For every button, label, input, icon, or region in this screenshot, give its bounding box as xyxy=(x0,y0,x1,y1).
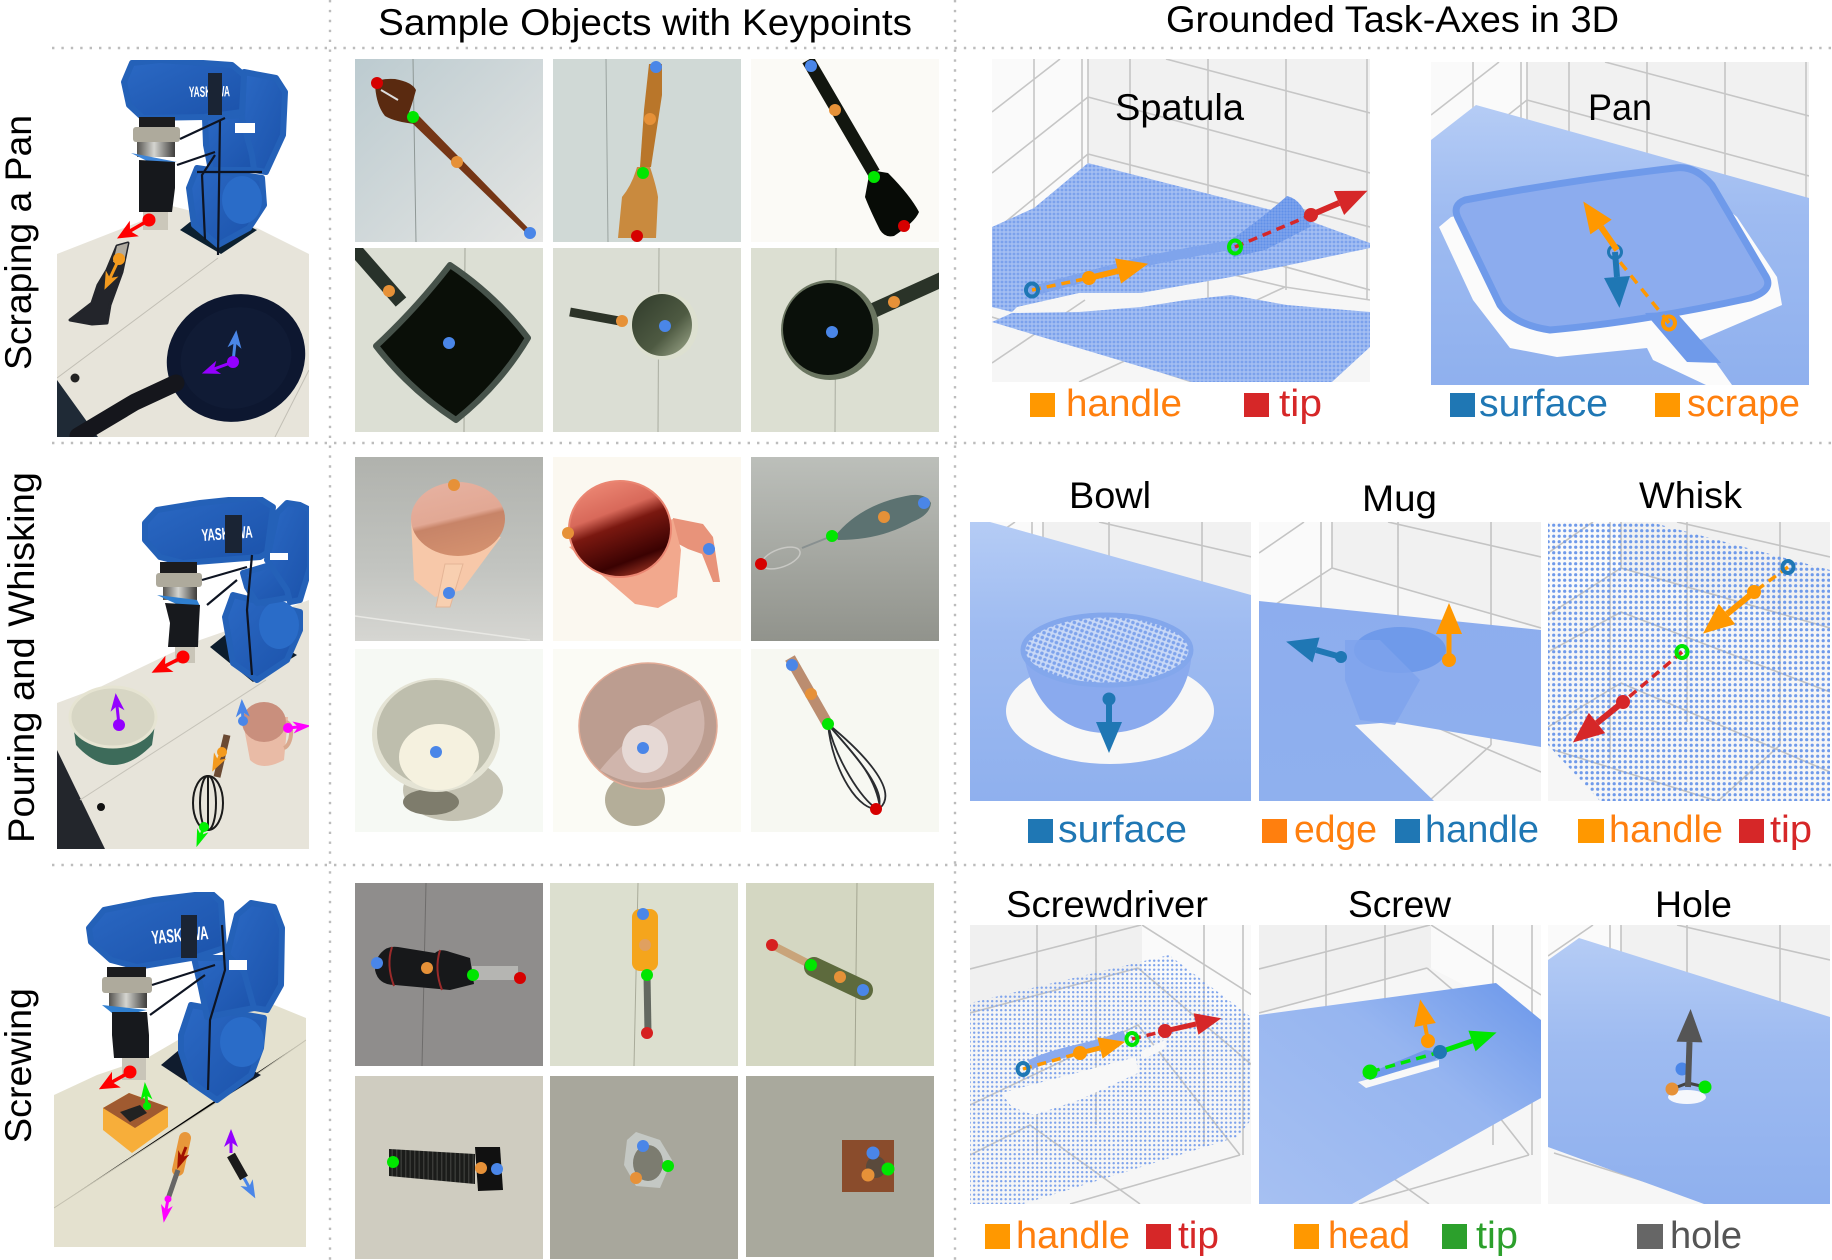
point cloud xyxy=(970,955,1251,1204)
legend: screw: head xyxy=(1328,1215,1410,1257)
3D panel: screw xyxy=(1259,925,1541,1204)
row label: pouring and whisking: Pouring and Whisking xyxy=(1,472,42,843)
legend: screw xyxy=(1294,1215,1518,1257)
point cloud xyxy=(970,522,1251,801)
panel title: hole: Hole xyxy=(1655,884,1732,925)
keypoints xyxy=(387,1156,503,1175)
object photo: olive screwdriver xyxy=(746,883,934,1066)
task axis arrows xyxy=(1316,634,1456,667)
object photo: wooden block with hole xyxy=(746,1076,934,1257)
object photo: peach mug xyxy=(355,457,543,641)
robot axes xyxy=(113,650,298,835)
object photo: hex nut xyxy=(550,1076,738,1259)
point cloud xyxy=(1259,983,1541,1204)
legend: whisk xyxy=(1578,809,1812,851)
task axis arrows xyxy=(1601,227,1675,330)
object photo: wooden spatula xyxy=(553,59,741,242)
panel title: bowl: Bowl xyxy=(1069,475,1151,516)
panel title: screwdriver: Screwdriver xyxy=(1006,884,1208,925)
keypoints xyxy=(766,939,869,996)
keypoints xyxy=(562,527,715,555)
legend: hole xyxy=(1637,1215,1742,1257)
object photo: pink bowl xyxy=(553,649,741,832)
object photo: small round pan xyxy=(553,248,741,432)
legend: whisk: handle xyxy=(1609,809,1723,851)
point cloud xyxy=(1431,105,1809,385)
legend: pan: scrape xyxy=(1687,383,1800,425)
3D panel: spatula xyxy=(992,59,1370,382)
brand text on robot: YASKAWA xyxy=(189,83,230,101)
keypoints xyxy=(637,908,653,1039)
3D panel: hole xyxy=(1548,925,1830,1204)
legend: whisk: tip xyxy=(1770,809,1812,851)
legend: screwdriver: handle xyxy=(1016,1215,1130,1257)
hole axis and keypoints xyxy=(1666,1042,1712,1096)
keypoints xyxy=(786,659,882,815)
legend: bowl: surface xyxy=(1058,809,1187,851)
robot axes xyxy=(110,214,239,369)
heading: grounded task axes: Grounded Task-Axes in 3D xyxy=(1166,0,1619,40)
object photo: balloon whisk xyxy=(751,649,939,832)
object photo: square pan xyxy=(355,248,543,432)
panel title: mug: Mug xyxy=(1362,478,1437,519)
object photo: large round pan xyxy=(751,248,939,432)
point cloud xyxy=(1548,938,1830,1204)
3D panel: whisk xyxy=(1548,522,1830,801)
object photo: electric whisk xyxy=(751,457,939,641)
legend: mug: handle xyxy=(1425,809,1539,851)
keypoints xyxy=(630,1140,674,1184)
task axis arrows xyxy=(1597,561,1794,723)
panel title: whisk: Whisk xyxy=(1639,475,1742,516)
object photo: wooden spoon xyxy=(355,59,543,242)
keypoint xyxy=(430,746,442,758)
point cloud xyxy=(1259,601,1541,801)
point cloud xyxy=(1548,522,1830,801)
object photo: black screwdriver xyxy=(355,883,543,1066)
keypoints xyxy=(826,296,900,338)
legend: mug xyxy=(1262,809,1539,851)
point cloud xyxy=(992,163,1370,382)
object photo: coral mug xyxy=(553,457,741,641)
legend: pan: surface xyxy=(1479,383,1608,425)
3D panel: screwdriver xyxy=(970,925,1251,1204)
keypoints xyxy=(616,315,671,332)
legend: pan xyxy=(1450,383,1800,425)
3D panel: mug xyxy=(1259,522,1541,801)
keypoint xyxy=(637,742,649,754)
photo: robot screwing xyxy=(54,892,306,1247)
brand text on robot: YASKAWA xyxy=(201,522,253,545)
legend: spatula: tip xyxy=(1279,383,1322,425)
task axis arrows xyxy=(1018,1024,1196,1075)
object photo: green bowl xyxy=(355,649,543,832)
panel title: pan: Pan xyxy=(1588,87,1652,128)
task axis arrows xyxy=(1362,1025,1472,1080)
keypoints xyxy=(443,479,460,599)
3D panel: pan xyxy=(1431,62,1809,385)
object photo: orange screwdriver xyxy=(550,883,738,1066)
object photo: black bolt xyxy=(355,1076,543,1259)
panel title: screw: Screw xyxy=(1348,884,1451,925)
keypoints xyxy=(371,957,526,984)
legend: screwdriver: tip xyxy=(1178,1215,1219,1257)
robot axes xyxy=(112,1066,249,1210)
legend: screw: tip xyxy=(1476,1215,1518,1257)
legend: screwdriver xyxy=(985,1215,1219,1257)
object photo: black spatula xyxy=(751,59,939,242)
legend: mug: edge xyxy=(1294,809,1377,851)
legend: spatula xyxy=(1030,383,1322,425)
keypoints xyxy=(371,77,536,239)
brand text on robot: YASKAWA xyxy=(151,923,209,949)
photo: robot pouring and whisking xyxy=(57,497,309,849)
keypoints xyxy=(631,61,662,242)
panel title: spatula: Spatula xyxy=(1115,87,1244,128)
keypoints xyxy=(755,497,930,570)
keypoints xyxy=(805,60,910,232)
legend: hole: hole xyxy=(1670,1215,1742,1257)
orange box with hole xyxy=(103,1093,168,1153)
photo: robot scraping a pan xyxy=(57,60,309,437)
task axis arrows xyxy=(1026,203,1339,296)
legend: spatula: handle xyxy=(1066,383,1182,425)
keypoints xyxy=(862,1146,894,1182)
heading: sample objects: Sample Objects with Keypoints xyxy=(378,2,912,43)
task axis arrow xyxy=(1102,692,1116,722)
3D panel: bowl xyxy=(970,522,1251,801)
keypoints xyxy=(383,285,455,349)
